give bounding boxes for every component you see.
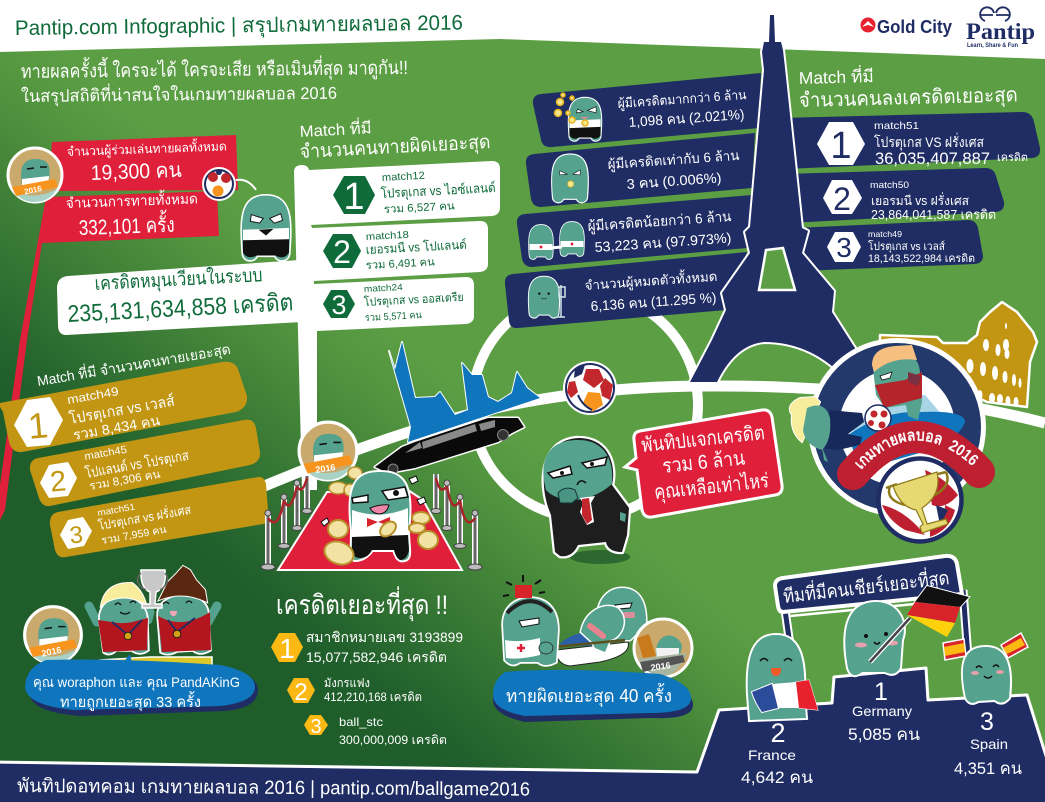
rank 1 [780,112,1040,169]
panel: more than 6 million [533,73,761,147]
rank 3: โปรตุเกส vs เวลส์ [868,239,945,253]
banner: most cheered teams [775,556,971,698]
heading: most wrong match: Match ที่มี [299,116,372,141]
panel: equal to 6 million: ผู้มีเครดิตเท่ากับ 6 ล้าน [607,148,740,173]
winners: yellow podium [98,657,212,668]
rank 3 [304,715,447,747]
rank 3 [323,282,464,324]
callout: speech bubble: คุณเหลือเท่าไหร่ [653,469,770,505]
navy footer and podium [0,668,1045,802]
callout: most wrong guesses [493,670,693,722]
navy panels: credit balance groups [505,73,761,328]
sticker: 2016 badge top left [8,148,62,202]
podium labels: 4,642 คน [741,768,813,787]
rank 1 [271,629,463,665]
callout: speech bubble: รวม 6 ล้าน [661,447,746,478]
trophy disc [878,458,962,542]
panel: less than 6 million: 53,223 คน (97.973%) [594,229,732,255]
left winner [89,583,150,654]
mascots: winners with trophy [89,566,217,654]
trophy [137,570,168,608]
panel: more than 6 million: 1,098 คน (2.021%) [628,106,745,130]
rank 1: สมาชิกหมายเลข 3193899 [306,629,463,645]
rank 3: 18,143,522,984 เครดิต [868,253,975,265]
bar 3: match51 [97,502,136,518]
colosseum [880,302,1037,407]
rank 2: รวม 6,491 คน [366,256,436,272]
rank 2: 412,210,168 เครดิต [324,690,422,704]
rank 2: เยอรมนี vs โปแลนด์ [365,237,467,257]
bar 1: โปรตุเกส vs เวลส์ [68,392,176,429]
rank 1: 1 [830,125,852,167]
bar 3 [50,477,269,557]
rank 1: 1 [343,176,365,218]
red flag panel: totals: 19,300 คน [90,159,182,185]
sticker: 2016 badge top left: 2016 [23,184,43,196]
rank 3: โปรตุเกส vs ออสเตรีย [363,290,464,309]
heading: most wrong match [299,116,491,164]
intro text [21,54,408,107]
rank 2: match18 [366,230,410,243]
panel: more than 6 million: ผู้มีเครดิตมากกว่า 6 ล้าน [617,87,747,112]
rank 2: 2 [294,679,308,706]
panel: equal to 6 million: 3 คน (0.006%) [626,169,722,192]
sticker: 2016 badge nurse [634,619,692,677]
bar 3: โปรตุเกส vs ฝรั่งเศส [97,501,193,534]
panel: total credit in system [57,260,302,335]
bar 2 [30,420,260,506]
red flag panel: totals: 332,101 ครั้ง [78,210,175,240]
panel: bankrupt users: 6,136 คน (11.295 %) [590,289,717,314]
sticker: 2016 badge nurse: 2016 [650,660,671,673]
icon: football by flag [203,168,256,200]
podium labels: France [748,747,796,763]
rank 1: โปรตุเกส VS ฝรั่งเศส [874,133,984,151]
rank 1: โปรตุเกส vs ไอซ์แลนด์ [380,180,496,202]
rank 3: match24 [364,282,403,294]
flags: Spain [943,633,1028,660]
rank 2: 23,864,041,587 เครดิต [871,207,996,222]
podium labels: Germany [852,703,912,719]
rank 2 [785,168,1004,223]
rank 3: match49 [868,229,902,239]
banner [853,437,979,474]
bar 3: รวม 7,959 คน [100,524,168,547]
bar 1: match49 [66,384,120,407]
round badge: game logo [788,338,995,544]
player kicking [872,345,922,420]
banner: most cheered teams: ทีมที่มีคนเชียร์เยอะที่สุด [782,564,951,609]
rank 2 [287,676,422,706]
panel: total credit in system: 235,131,634,858 เครดิต [67,289,294,328]
rank 3 [795,220,983,271]
rank 1: รวม 6,527 คน [384,200,456,216]
callout: most correct guesses [25,654,258,716]
podium labels: 2 [770,718,786,748]
sticker: 2016 badge lower left [25,607,81,663]
heading: most credit: เครดิตเยอะที่สุด !! [276,586,448,622]
rank 1: 1 [279,633,295,664]
intro text: ในสรุปสถิติที่น่าสนใจในเกมทายผลบอล 2016 [21,81,337,107]
mascot: Spain supporter [943,633,1028,703]
rank 2 [323,230,467,272]
heading: most credit placed [799,64,1018,113]
sticker: 2016 badge at red carpet [299,422,357,480]
round badge: game logo: เกมทายผลบอล 2016 [854,431,978,469]
bar 1: รวม 8,434 คน [72,412,162,443]
rank 1: match12 [382,170,425,184]
footer text: พันทิปดอทคอม เกมทายผลบอล 2016 | pantip.com/ballgame2016 [17,776,530,801]
badge banner text [861,440,982,476]
bar 3: 3 [68,521,84,550]
rank 2: มังกรแฟง [324,676,370,690]
nurse behind [597,588,646,640]
callout: most wrong guesses: ทายผิดเยอะสุด 40 ครั้ง [506,683,672,707]
rank 3: 3 [310,716,322,738]
bar 2: 2 [49,465,68,499]
limousine [375,418,524,474]
rank 1: 15,077,582,946 เครดิต [306,649,447,665]
heading: most wrong match: จำนวนคนทายผิดเยอะสุด [299,132,491,164]
nurse front [503,598,558,665]
small ball [865,405,891,431]
right winner [158,566,217,654]
panel: bankrupt users [505,252,747,328]
rank 3: 300,000,009 เครดิต [339,733,447,747]
red flag panel: totals: จำนวนผู้ร่วมเล่นทายผลทั้งหมด [67,136,227,160]
bar 1: 1 [26,404,50,447]
sticker: 2016 badge at red carpet: 2016 [315,462,336,475]
eiffel tower [690,15,880,385]
podium labels: Spain [970,736,1008,752]
panel: most guessed matches [0,362,269,557]
mascot: suited banker [543,438,630,564]
podium labels: 3 [980,708,994,736]
mascots: nurses carrying stretcher [503,575,646,666]
rank 1: 36,035,407,887 [875,149,990,168]
mascot: rich with coins [321,467,438,568]
rank 1: เครดิต [997,152,1028,164]
sticker: 2016 badge lower left: 2016 [41,645,62,659]
callout: speech bubble: พันทิปแจกเครดิต [640,422,766,457]
panel: less than 6 million [517,195,752,267]
podium labels [741,678,1022,787]
rank 3: 3 [331,290,347,320]
callout: speech bubble [625,410,782,517]
stretcher [556,642,628,666]
mascot: referee [242,196,290,260]
bar 2: รวม 8,306 คน [88,469,162,493]
rank 2: match50 [870,180,909,191]
flag: France [752,680,818,712]
player fallen [790,397,864,462]
list: most credit ranking [271,629,463,747]
red flag panel: totals: จำนวนการทายทั้งหมด [65,188,198,211]
icon: football [563,361,617,415]
flag: Germany [907,586,969,637]
header title: Pantip.com Infographic | สรุปเกมทายผลบอล 2016 [15,12,463,41]
red carpet with stanchions [261,474,482,570]
podium labels: 1 [874,678,888,706]
logo: Pantip [966,7,1035,49]
rank 3: ball_stc [339,715,383,729]
rank 1 [333,170,496,218]
podium labels: 5,085 คน [848,725,920,744]
logo: Pantip: Pantip [966,19,1035,44]
bar 2: โปแลนด์ vs โปรตุเกส [84,447,190,482]
panel: less than 6 million: ผู้มีเครดิตน้อยกว่า 6 ล้าน [587,208,732,235]
rank 2: 2 [833,181,851,217]
rank 3: 3 [836,232,852,263]
mascot: France supporter [748,635,818,720]
logo: Pantip: Learn, Share & Fun [967,43,1018,49]
rank 2: 2 [333,234,351,270]
rank 1: match51 [874,120,919,132]
rank 2: เยอรมนี vs ฝรั่งเศส [871,192,969,208]
mascot: Germany supporter [845,586,969,675]
callout: most correct guesses: ทายถูกเยอะสุด 33 ครั้ง [60,691,201,712]
logo: Gold City: Gold City [877,17,952,37]
podium labels: 4,351 คน [954,759,1022,778]
panel: total credit in system: เครดิตหมุนเวียนในระบบ [94,264,263,296]
panel: equal to 6 million [526,133,755,207]
heading: most guessed match: Match ที่มี จำนวนคนทายเยอะสุด [36,340,232,390]
siren [515,585,532,598]
bar 2: match45 [83,444,128,463]
bar 1 [0,362,247,452]
rank 3: รวม 5,571 คน [365,310,422,324]
panel: most credit placed matches [780,112,1040,271]
heading: most credit placed: Match ที่มี [799,64,874,88]
callout: most correct guesses: คุณ woraphon และ คุณ PandAKinG [33,674,240,691]
heading: most credit placed: จำนวนคนลงเครดิตเยอะสุด [799,84,1018,113]
panel: signpost most wrong matches [294,161,500,490]
red flag panel: totals [0,135,238,520]
cathedral skyline [389,342,540,442]
panel: bankrupt users: จำนวนผู้หมดตัวทั้งหมด [584,267,718,294]
pitch lines [262,292,1045,518]
intro text: ทายผลครั้งนี้ ใครจะได้ ใครจะเสีย หรือเมินที่สุด มาดูกัน!! [21,54,408,84]
